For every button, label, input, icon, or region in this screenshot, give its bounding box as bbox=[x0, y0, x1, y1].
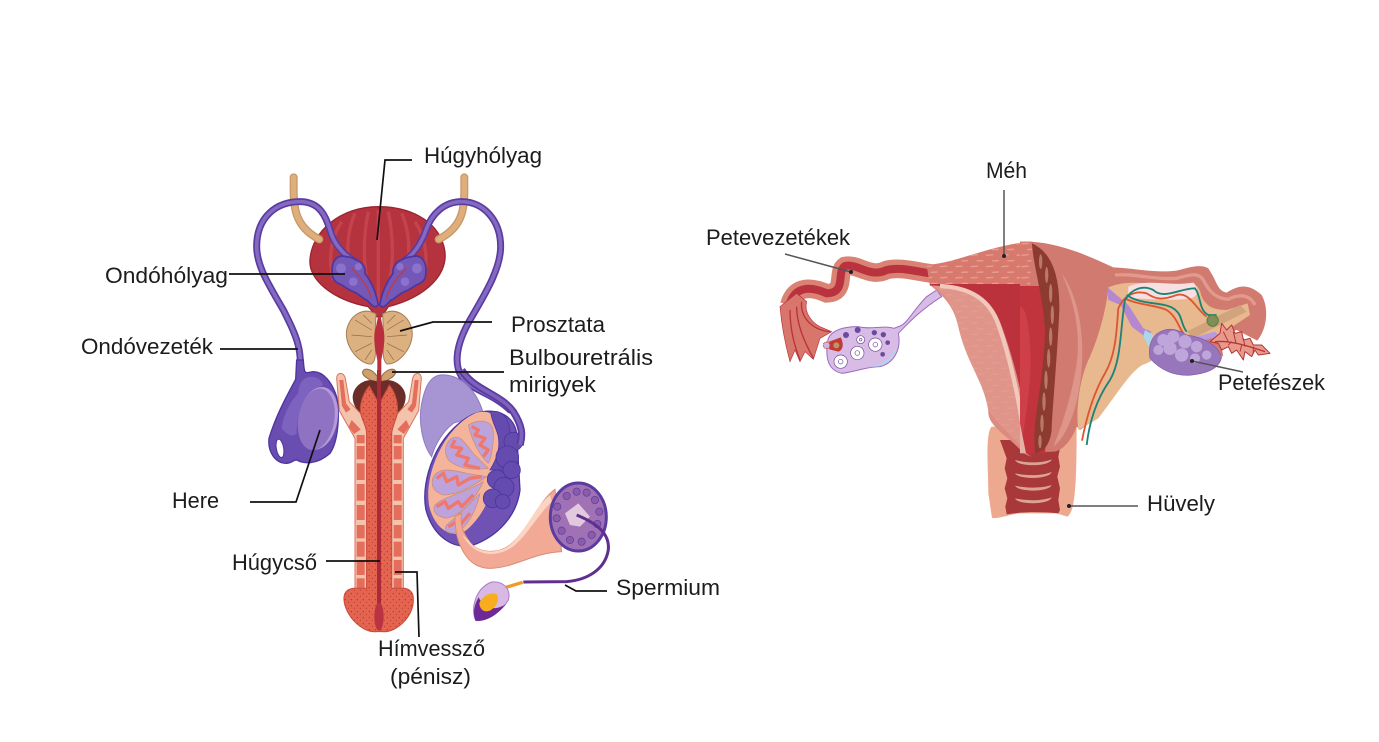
label: Húgyhólyag with leader line: Húgyhólyag bbox=[424, 143, 542, 168]
organ: uterus left half bbox=[927, 242, 1031, 457]
label: Bulbouretrális mirigyek with leader line: Bulbouretrális bbox=[509, 345, 653, 370]
label: Prosztata with leader line: Prosztata bbox=[511, 312, 606, 337]
organ: right ovary bbox=[1149, 329, 1222, 375]
label: Prosztata with leader line bbox=[400, 312, 606, 337]
label: Méh with leader line: Méh bbox=[986, 158, 1027, 183]
organ: back right testicle bbox=[420, 375, 483, 457]
label: Ondóvezeték with leader line: Ondóvezeték bbox=[81, 334, 214, 359]
label: Hímvessző (pénisz) with leader line bbox=[378, 572, 485, 689]
diagram: male reproductive system bbox=[257, 177, 608, 632]
organ: vagina bbox=[987, 427, 1077, 518]
tube connecting to seminiferous section bbox=[455, 489, 562, 568]
organ: seminiferous tubule section bbox=[550, 483, 606, 551]
organ: uterus right half bbox=[1020, 242, 1266, 453]
organ: bulbourethral glands and bulb bbox=[353, 369, 406, 417]
blood vessels bbox=[1082, 288, 1217, 445]
lobules bbox=[432, 421, 493, 533]
label: Ondóhólyag with leader line: Ondóhólyag bbox=[105, 263, 228, 288]
label: Hüvely with leader line bbox=[1067, 491, 1215, 516]
tubes: ureters bbox=[294, 177, 464, 239]
organ: testicle cross-section bbox=[425, 370, 562, 568]
diagram: female reproductive system bbox=[780, 242, 1270, 518]
label: Spermium with leader line: Spermium bbox=[616, 575, 720, 600]
label: Petevezetékek with leader line bbox=[706, 225, 853, 274]
organ: penis cross-section bbox=[337, 370, 421, 632]
label: Spermium with leader line bbox=[565, 575, 720, 600]
label: Petevezetékek with leader line: Petevezetékek bbox=[706, 225, 851, 250]
organ: right fimbriae bbox=[1210, 323, 1270, 360]
tube: left vas deferens bbox=[257, 202, 355, 380]
label: Bulbouretrális mirigyek with leader line: mirigyek bbox=[509, 372, 597, 397]
label: Bulbouretrális mirigyek with leader line bbox=[392, 345, 653, 397]
label: Hímvessző (pénisz) with leader line: Hímvessző bbox=[378, 636, 485, 661]
organ: prostate bbox=[346, 310, 412, 427]
icon: sperm cell bbox=[474, 515, 608, 621]
right peach strip bbox=[392, 373, 421, 593]
label: Húgyhólyag with leader line bbox=[377, 143, 542, 240]
organ: left fallopian tube with fimbriae bbox=[780, 266, 943, 362]
organ: left testicle bbox=[269, 360, 343, 463]
label: Petefészek with leader line bbox=[1190, 359, 1326, 395]
tube: right vas deferens bbox=[403, 202, 510, 410]
epididymis bbox=[483, 411, 523, 509]
left peach strip bbox=[337, 373, 367, 593]
label: Hímvessző (pénisz) with leader line: (pénisz) bbox=[390, 664, 471, 689]
label: Hüvely with leader line: Hüvely bbox=[1147, 491, 1215, 516]
organ: bladder bbox=[294, 177, 464, 317]
label: Húgycső with leader line: Húgycső bbox=[232, 550, 317, 575]
label: Here with leader line: Here bbox=[172, 488, 219, 513]
organ: left ovary bbox=[823, 290, 942, 373]
label: Here with leader line bbox=[172, 430, 320, 513]
spongy central body bbox=[344, 385, 413, 632]
label: Méh with leader line bbox=[986, 158, 1027, 258]
label: Petefészek with leader line: Petefészek bbox=[1218, 370, 1326, 395]
organ: seminal vesicles bbox=[332, 256, 426, 307]
